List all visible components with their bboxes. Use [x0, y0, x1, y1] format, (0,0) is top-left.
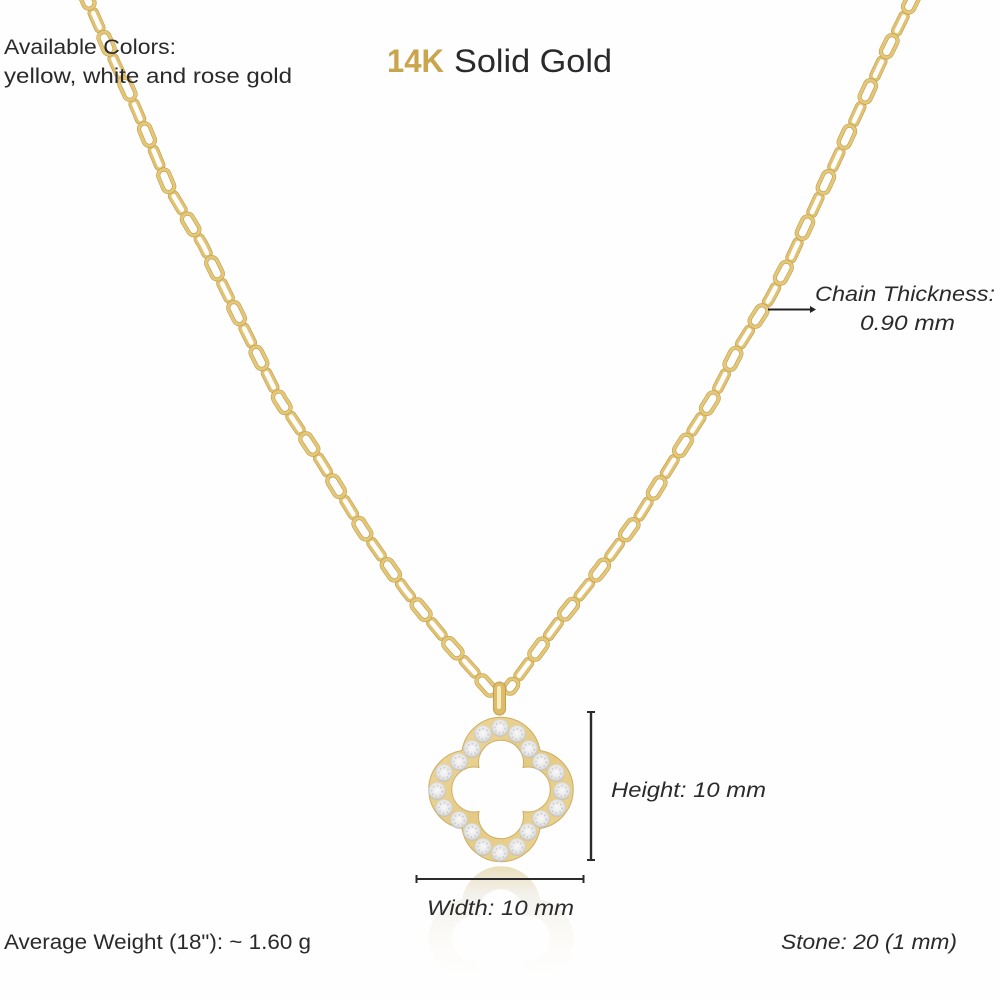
text: available colors: Available Colors:: [4, 35, 176, 59]
width dimension line: [416, 875, 584, 883]
text: available colors: yellow, white and rose gold: [4, 64, 292, 88]
text: width: Width: 10 mm: [427, 896, 574, 920]
text: height: Height: 10 mm: [611, 778, 766, 802]
right chain strand: [510, 0, 914, 688]
title: 14K: [387, 43, 444, 79]
title: [387, 43, 612, 79]
text: chain thickness: Chain Thickness:: [815, 282, 995, 306]
pendant: [428, 682, 573, 862]
pendant bail: [494, 682, 506, 715]
title: Solid Gold: [454, 43, 612, 79]
pave stones: [428, 719, 571, 862]
pendant reflection: [429, 866, 573, 1000]
left chain strand: [84, 0, 492, 692]
text: average weight: Average Weight (18"): ~ 1.60 g: [4, 930, 311, 954]
height dimension line: [587, 712, 595, 860]
text: chain thickness: 0.90 mm: [860, 311, 955, 335]
text: chain thickness: [815, 282, 995, 335]
chain thickness arrow: [768, 306, 816, 313]
clover frame: [429, 717, 573, 862]
text: stone: Stone: 20 (1 mm): [781, 930, 957, 954]
text: available colors: [4, 35, 292, 88]
